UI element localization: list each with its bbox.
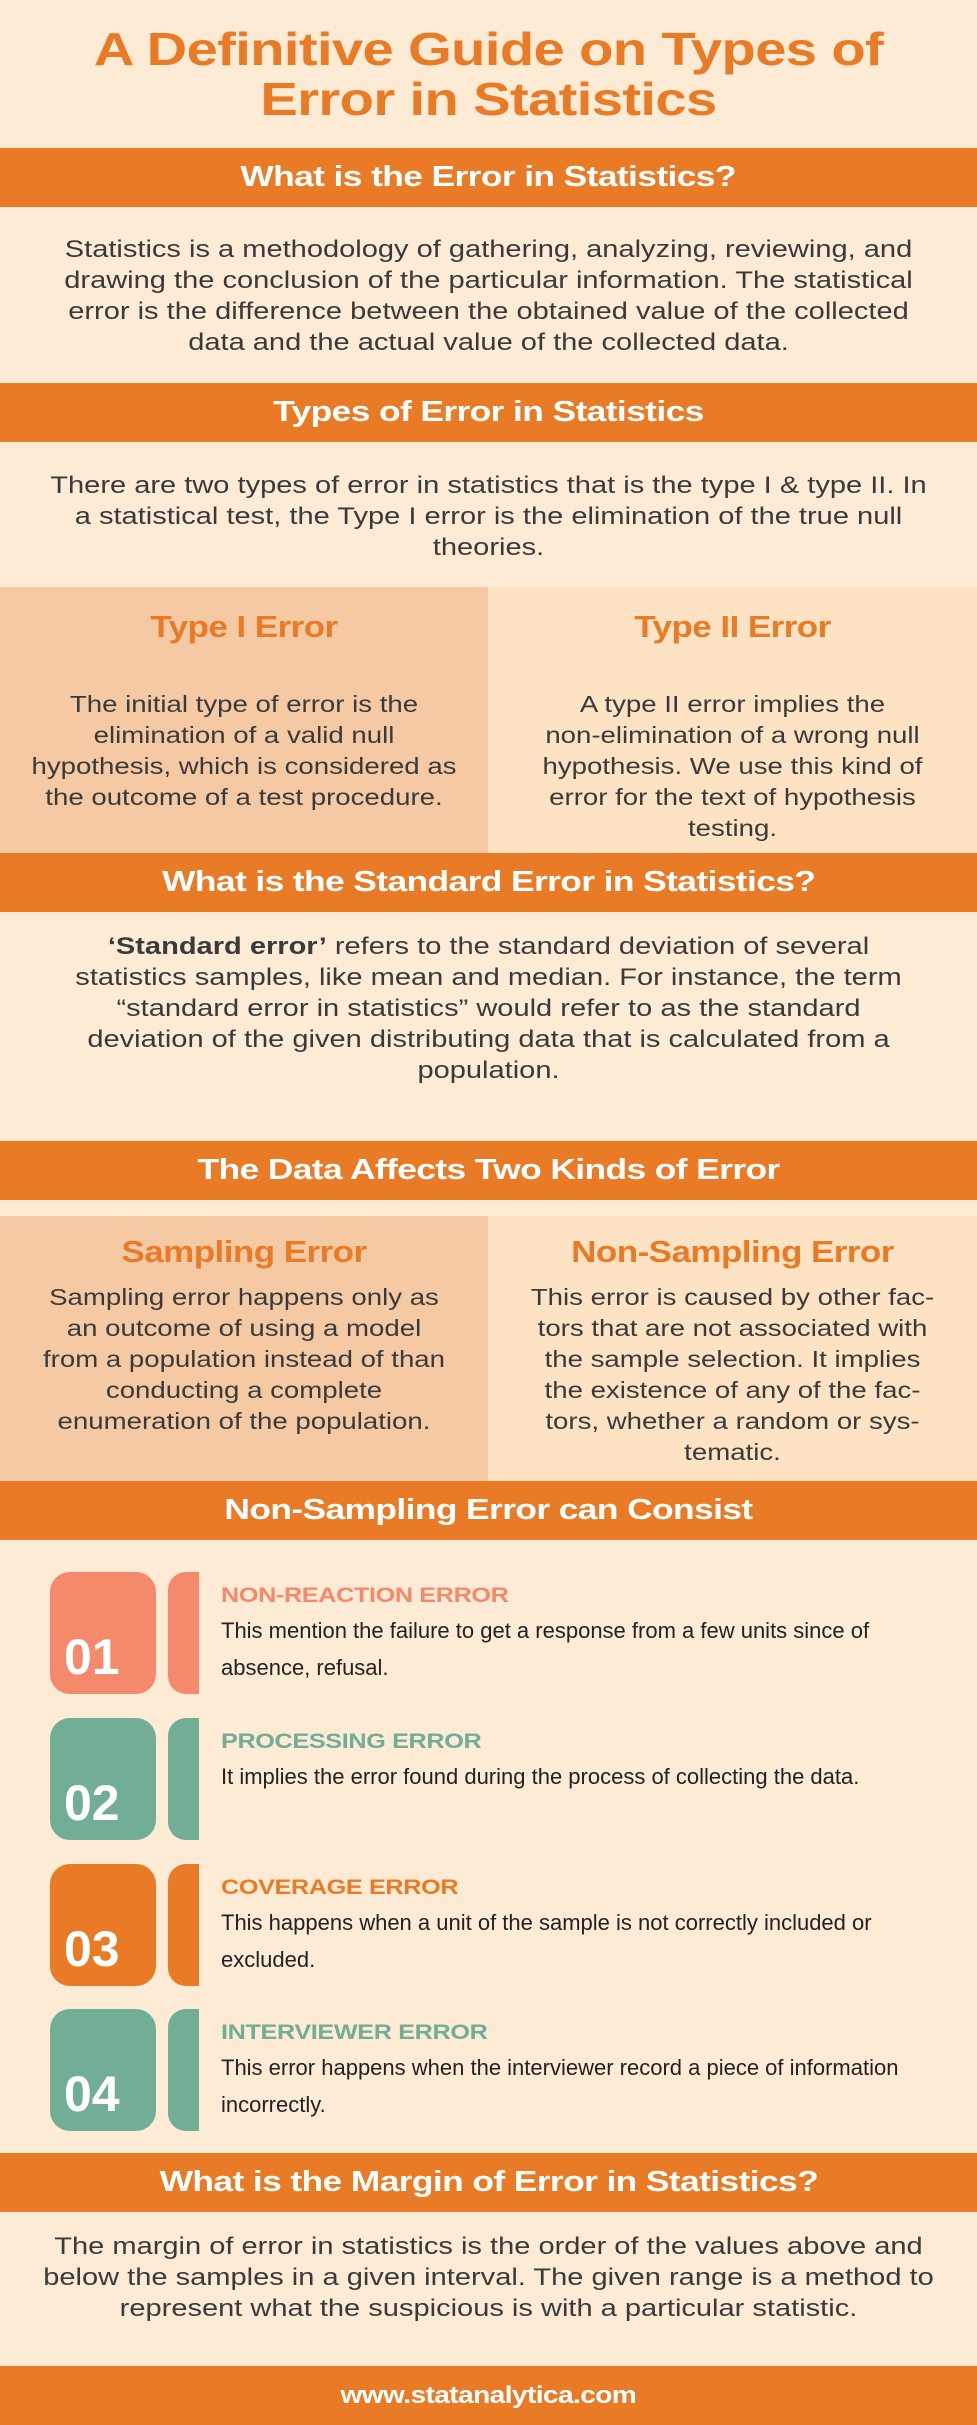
item 04: incorrectly. <box>221 2092 326 2117</box>
type I content <box>32 609 456 810</box>
sampling content <box>43 1234 445 1434</box>
item 03: This happens when a unit of the sample is not correctly included or <box>221 1910 872 1935</box>
panel: type II <box>488 587 977 853</box>
footer <box>0 2366 977 2425</box>
item 01 <box>50 1572 870 1694</box>
text: standard error <box>75 933 902 1084</box>
type I content: elimination of a valid null <box>94 722 394 748</box>
heading: data affects <box>0 1141 977 1200</box>
item 04: 04 <box>64 2066 120 2122</box>
item 01: 01 <box>64 1629 120 1685</box>
heading: data affects: The Data Affects Two Kinds of Error <box>197 1154 780 1186</box>
text: margin of error <box>43 2233 934 2322</box>
sampling content: Sampling Error <box>121 1234 367 1269</box>
title: A Definitive Guide on Types of <box>94 23 883 75</box>
text: margin of error: The margin of error in statistics is the order of the values above and <box>54 2233 923 2260</box>
text: error definition: error is the difference between the obtained value of the collected <box>68 298 909 325</box>
sampling content: enumeration of the population. <box>58 1408 430 1434</box>
item 01: This mention the failure to get a response from a few units since of <box>221 1618 869 1643</box>
type I content: The initial type of error is the <box>70 691 418 717</box>
item 03 <box>50 1864 872 1986</box>
item 03: COVERAGE ERROR <box>221 1876 458 1899</box>
heading: non-sampling consist: Non-Sampling Error can Consist <box>224 1494 753 1526</box>
type I content: Type I Error <box>150 609 338 644</box>
type II content: Type II Error <box>634 609 831 644</box>
heading: types: Types of Error in Statistics <box>273 396 704 428</box>
text: standard error: “standard error in statistics” would refer to as the standard <box>116 995 861 1022</box>
item 02: 02 <box>64 1775 120 1831</box>
type I content: the outcome of a test procedure. <box>45 784 443 810</box>
heading: non-sampling consist <box>0 1481 977 1540</box>
item 02: PROCESSING ERROR <box>221 1730 481 1753</box>
text: types intro: a statistical test, the Type I error is the elimination of the true null <box>75 503 902 530</box>
item 02: It implies the error found during the process of collecting the data. <box>221 1764 859 1789</box>
text: types intro: There are two types of error in statistics that is the type I & type II. In <box>50 472 927 499</box>
type II content <box>543 609 922 841</box>
type I content: hypothesis, which is considered as <box>32 753 456 779</box>
text: standard error: population. <box>417 1057 560 1084</box>
item 04 <box>50 2009 898 2131</box>
text: types intro: theories. <box>433 534 544 561</box>
item 04: This error happens when the interviewer record a piece of information <box>221 2055 898 2080</box>
non-sampling content: tors, whether a random or sys- <box>545 1408 920 1434</box>
item 04: INTERVIEWER ERROR <box>221 2021 487 2044</box>
text: types intro <box>50 472 927 561</box>
text: error definition <box>64 236 913 356</box>
type II content: error for the text of hypothesis <box>549 784 916 810</box>
text: error definition: data and the actual value of the collected data. <box>188 329 789 356</box>
title <box>94 23 884 125</box>
heading: standard error: What is the Standard Error in Statistics? <box>162 866 815 898</box>
panel: non-sampling <box>488 1216 977 1481</box>
type II content: A type II error implies the <box>580 691 885 717</box>
heading: what is error: What is the Error in Statistics? <box>241 161 736 193</box>
non-sampling content: tematic. <box>684 1439 781 1465</box>
footer: www.statanalytica.com <box>341 2382 636 2409</box>
non-sampling content <box>531 1234 934 1465</box>
heading: types <box>0 383 977 442</box>
text: error definition: drawing the conclusion of the particular information. The statistical <box>64 267 913 294</box>
text: margin of error: below the samples in a given interval. The given range is a method to <box>43 2264 934 2291</box>
sampling content: from a population instead of than <box>43 1346 445 1372</box>
item 03: 03 <box>64 1921 120 1977</box>
sampling content: conducting a complete <box>106 1377 382 1403</box>
type II content: non-elimination of a wrong null <box>545 722 920 748</box>
sampling content: Sampling error happens only as <box>49 1284 439 1310</box>
text: standard error: ‘Standard error’ refers to the standard deviation of several <box>108 933 869 960</box>
non-sampling content: Non-Sampling Error <box>571 1234 894 1269</box>
non-sampling content: This error is caused by other fac- <box>531 1284 934 1310</box>
item 01: NON-REACTION ERROR <box>221 1584 509 1607</box>
item 01: absence, refusal. <box>221 1655 389 1680</box>
item 02 <box>50 1718 859 1840</box>
heading: what is error <box>0 148 977 207</box>
heading: margin of error <box>0 2153 977 2212</box>
non-sampling content: tors that are not associated with <box>538 1315 927 1341</box>
text: standard error: deviation of the given distributing data that is calculated from a <box>87 1026 890 1053</box>
item 03: excluded. <box>221 1947 315 1972</box>
non-sampling content: the existence of any of the fac- <box>545 1377 920 1403</box>
panel: sampling <box>0 1216 488 1481</box>
type II content: hypothesis. We use this kind of <box>543 753 922 779</box>
text: margin of error: represent what the suspicious is with a particular statistic. <box>120 2295 857 2322</box>
heading: margin of error: What is the Margin of Error in Statistics? <box>159 2166 818 2198</box>
non-sampling content: the sample selection. It implies <box>545 1346 920 1372</box>
sampling content: an outcome of using a model <box>67 1315 421 1341</box>
panel: type I <box>0 587 488 853</box>
text: standard error: statistics samples, like mean and median. For instance, the term <box>75 964 902 991</box>
heading: standard error <box>0 853 977 912</box>
type II content: testing. <box>688 815 777 841</box>
text: error definition: Statistics is a methodology of gathering, analyzing, reviewing, and <box>65 236 912 263</box>
title: Error in Statistics <box>260 73 717 125</box>
